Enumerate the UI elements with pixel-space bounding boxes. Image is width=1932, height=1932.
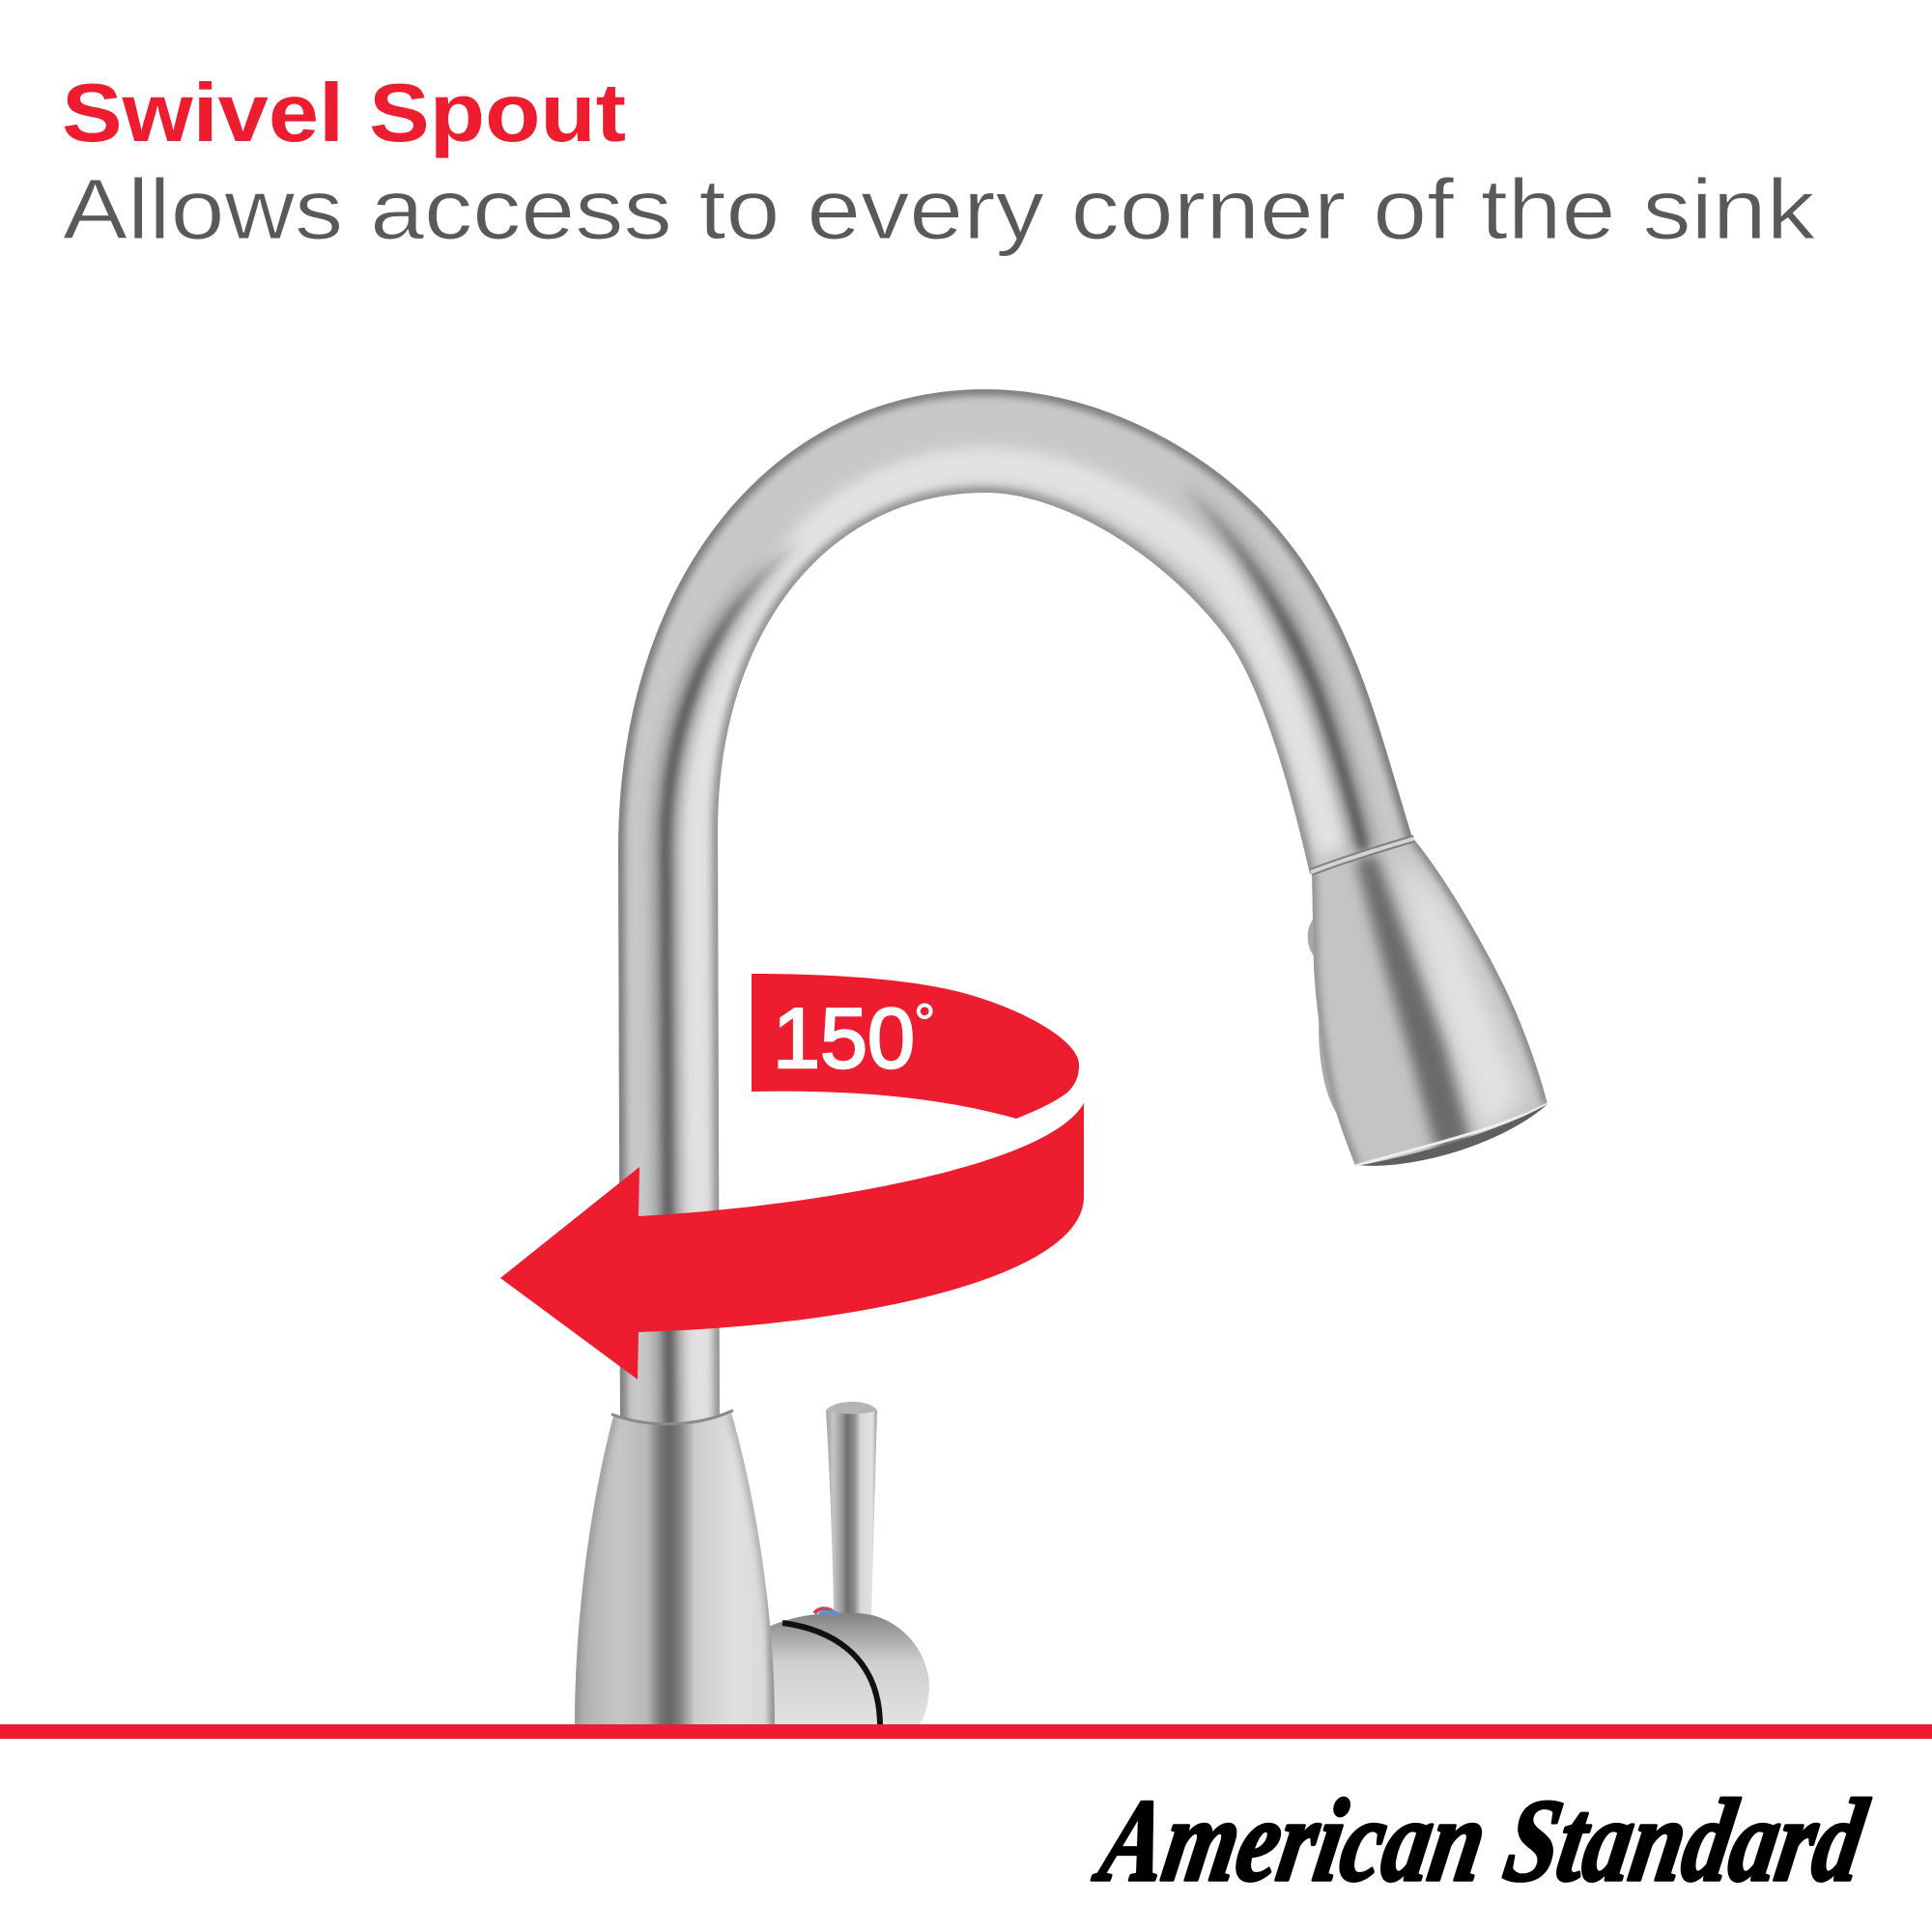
spray head buttons	[1308, 918, 1339, 1116]
spout tube	[609, 382, 1430, 1435]
rotation arrow: upper ribbon	[752, 974, 1079, 1119]
rotation arrow: lower ribbon and arrowhead	[500, 1103, 1084, 1379]
floor line	[0, 1724, 1932, 1739]
faucet base	[575, 1410, 775, 1724]
spout ring	[1311, 838, 1414, 872]
spray head nozzle face	[1357, 1104, 1548, 1166]
rotation label: 150 degrees: °	[914, 992, 935, 1053]
rotation label: 150 degrees: 150	[773, 990, 915, 1086]
title: Swivel Spout	[62, 68, 626, 159]
handle lever	[826, 1402, 877, 1617]
subtitle: Allows access to every corner of the sink	[63, 161, 1816, 257]
spray head	[1312, 840, 1548, 1166]
handle hub	[769, 1608, 929, 1724]
faucet	[575, 382, 1555, 1724]
